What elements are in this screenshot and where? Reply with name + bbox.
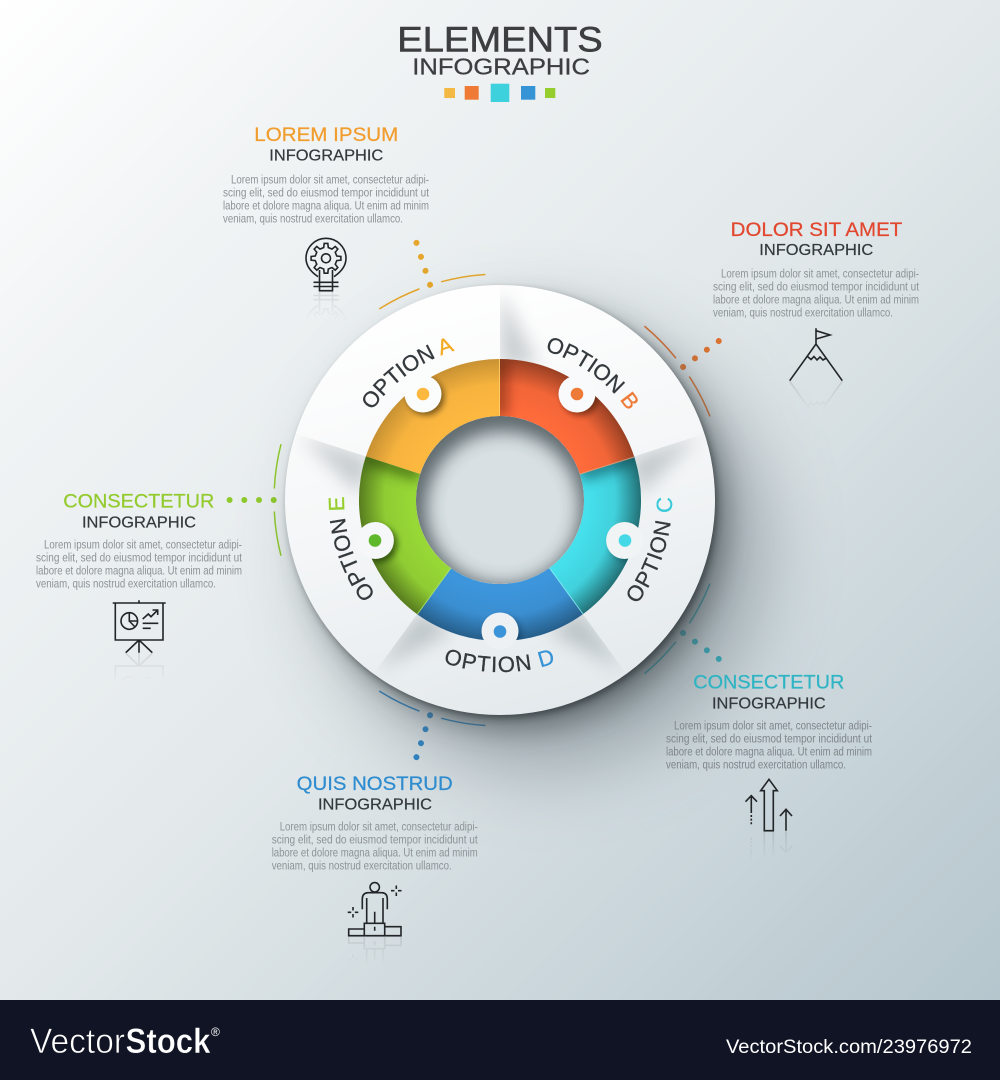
body text: Lorem ipsum dolor sit amet, consectetur adipi-	[280, 819, 478, 833]
label: option A: OPTION A	[363, 338, 455, 408]
hole	[416, 416, 584, 584]
body text: labore et dolore magna aliqua. Ut enim ad minim	[223, 198, 429, 212]
panel: dolor sit amet	[713, 222, 919, 400]
main title	[397, 21, 603, 79]
segment shading	[359, 359, 646, 652]
body text: Lorem ipsum dolor sit amet, consectetur adipi-	[674, 718, 872, 732]
segment C	[549, 456, 641, 614]
accent: D	[362, 691, 485, 777]
footer logo: Vector	[30, 1022, 125, 1061]
segment D	[417, 568, 583, 641]
paper disc	[285, 285, 715, 715]
notch C	[606, 522, 643, 559]
body text: scing elit, sed do eiusmod tempor incididunt ut	[272, 832, 478, 846]
body text	[36, 537, 242, 590]
body text: veniam, quis nostrud exercitation ullamco.	[666, 757, 846, 771]
panel: quis nostrud	[272, 776, 478, 956]
footer bar	[0, 1000, 1000, 1080]
body text: labore et dolore magna aliqua. Ut enim ad minim	[272, 845, 478, 859]
body text: scing elit, sed do eiusmod tempor incididunt ut	[36, 550, 242, 564]
body text: scing elit, sed do eiusmod tempor incididunt ut	[223, 185, 429, 199]
body text: veniam, quis nostrud exercitation ullamco.	[223, 211, 403, 225]
body text	[272, 819, 478, 872]
accent: B	[644, 294, 754, 416]
heading: CONSECTETUR	[63, 490, 214, 512]
seam highlights	[418, 359, 634, 614]
notch A	[404, 376, 442, 412]
segment B	[500, 359, 634, 474]
segment E	[359, 456, 451, 614]
footer logo	[30, 1022, 220, 1061]
subheading: INFOGRAPHIC	[759, 242, 873, 259]
icon: arrows up	[745, 778, 792, 850]
footer logo: ®	[211, 1025, 220, 1039]
heading: QUIS NOSTRUD	[297, 773, 453, 795]
panel: consectetur teal	[666, 674, 872, 850]
label: option E: OPTION E	[328, 497, 373, 600]
colour squares	[444, 84, 555, 102]
body text: veniam, quis nostrud exercitation ullamco.	[272, 858, 452, 872]
label: option D: OPTION D	[446, 650, 554, 672]
wheel shadow	[289, 290, 760, 765]
heading: DOLOR SIT AMET	[731, 219, 902, 241]
footer url: VectorStock.com/23976972	[726, 1037, 972, 1058]
notch D	[482, 612, 518, 650]
panel: lorem ipsum	[223, 127, 429, 310]
subheading: INFOGRAPHIC	[269, 148, 383, 165]
body text: labore et dolore magna aliqua. Ut enim ad minim	[36, 563, 242, 577]
body text: labore et dolore magna aliqua. Ut enim ad minim	[713, 292, 919, 306]
accent: C	[644, 584, 754, 706]
body text: labore et dolore magna aliqua. Ut enim ad minim	[666, 744, 872, 758]
footer logo: Stock	[126, 1022, 211, 1061]
wheel	[285, 285, 715, 715]
notch B	[558, 376, 596, 412]
notch E	[357, 522, 394, 559]
subheading: INFOGRAPHIC	[82, 514, 196, 531]
heading: LOREM IPSUM	[254, 124, 398, 146]
body text	[713, 266, 919, 319]
body text: veniam, quis nostrud exercitation ullamco.	[36, 576, 216, 590]
heading: CONSECTETUR	[693, 671, 844, 693]
icon: presentation board	[112, 600, 166, 672]
body text: Lorem ipsum dolor sit amet, consectetur adipi-	[721, 266, 919, 280]
body text	[666, 718, 872, 771]
icon: mountain flag	[789, 328, 843, 400]
accent: E	[227, 444, 281, 556]
body text	[223, 172, 429, 225]
main title: ELEMENTS	[397, 21, 603, 60]
body text: veniam, quis nostrud exercitation ullamco.	[713, 305, 893, 319]
segment A	[366, 359, 500, 474]
wedge fold shadows	[305, 296, 695, 668]
accent: A	[362, 223, 485, 309]
body text: Lorem ipsum dolor sit amet, consectetur adipi-	[231, 172, 429, 186]
subheading: INFOGRAPHIC	[318, 796, 432, 813]
icon: light bulb gear	[305, 238, 347, 310]
icon: person on podium	[348, 882, 402, 956]
body text: Lorem ipsum dolor sit amet, consectetur adipi-	[44, 537, 242, 551]
panel: consectetur green	[36, 494, 242, 672]
main title: INFOGRAPHIC	[412, 53, 590, 79]
body text: scing elit, sed do eiusmod tempor incididunt ut	[666, 731, 872, 745]
body text: scing elit, sed do eiusmod tempor incididunt ut	[713, 279, 919, 293]
label: option B: OPTION B	[548, 338, 638, 409]
label: option C: OPTION C	[627, 498, 672, 602]
subheading: INFOGRAPHIC	[712, 695, 826, 712]
